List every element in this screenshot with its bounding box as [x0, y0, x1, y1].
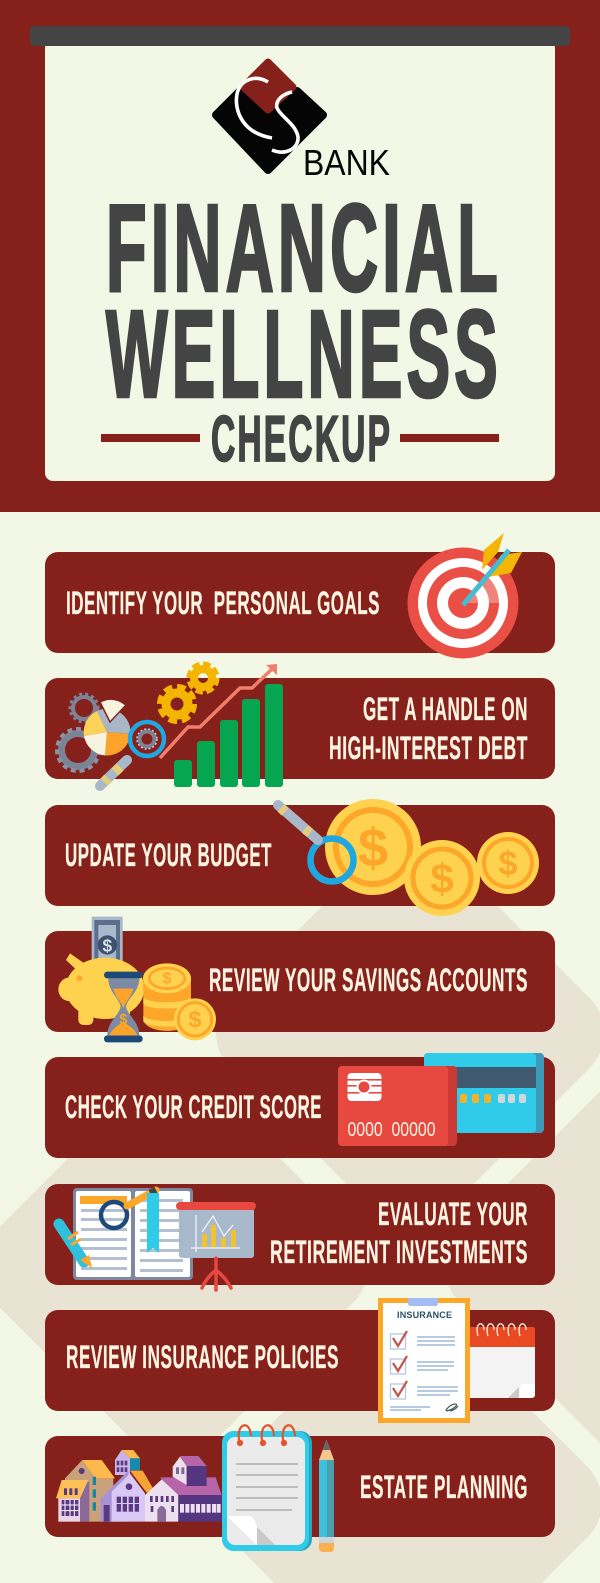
icon: piggy bank, hourglass and coins: $: [103, 935, 113, 955]
header band: [0, 0, 600, 512]
icon: piggy bank, hourglass and coins: $: [163, 971, 172, 988]
row 3: update budget: UPDATE YOUR BUDGET: [65, 837, 272, 873]
icon: target with arrow: [408, 533, 522, 658]
icon: coins and magnifier: $: [499, 845, 518, 883]
header panel: [45, 40, 555, 481]
icon: houses: [56, 1450, 222, 1522]
icon: piggy bank, hourglass and coins: $: [189, 1007, 202, 1033]
icon: insurance clipboard: [378, 1298, 470, 1423]
icon: credit cards: 0000 00000: [348, 1119, 436, 1141]
icon: open book, pen and presentation board: [59, 1188, 256, 1290]
subtitle: Checkup: CHECKUP: [211, 402, 392, 475]
row 6: retirement investments: [45, 1184, 555, 1290]
header top bar: [30, 26, 570, 46]
icon: coins and magnifier: $: [430, 855, 454, 902]
row 5: credit score: [45, 1053, 555, 1158]
icon: piggy bank, hourglass and coins: [58, 917, 216, 1042]
icon: calendar: [465, 1324, 535, 1398]
icon: credit cards: [338, 1053, 544, 1146]
icon: spiral notepad: [222, 1425, 312, 1551]
logo: CS Bank: [216, 62, 390, 183]
icon: pencil: [319, 1440, 334, 1552]
subtitle: Checkup: [101, 402, 499, 475]
icon: insurance clipboard: INSURANCE: [397, 1310, 452, 1320]
icon: piggy bank, hourglass and coins: $: [119, 1012, 127, 1028]
row 4: savings accounts: [45, 917, 555, 1042]
icon: coins and magnifier: [278, 799, 539, 916]
row 7: insurance policies: [45, 1298, 555, 1423]
logo: CS Bank: BANK: [303, 142, 390, 183]
row 1: identify goals: [45, 533, 555, 658]
row 7: insurance policies: REVIEW INSURANCE POLICIES: [66, 1339, 339, 1375]
row 8: estate planning: [45, 1425, 555, 1552]
icon: coins and magnifier: $: [358, 818, 388, 878]
icon: gears, pie chart and growth bars: [57, 664, 283, 787]
row 5: credit score: CHECK YOUR CREDIT SCORE: [65, 1089, 322, 1125]
row 3: update budget: [45, 799, 555, 916]
row 2: high-interest debt: [45, 664, 555, 787]
